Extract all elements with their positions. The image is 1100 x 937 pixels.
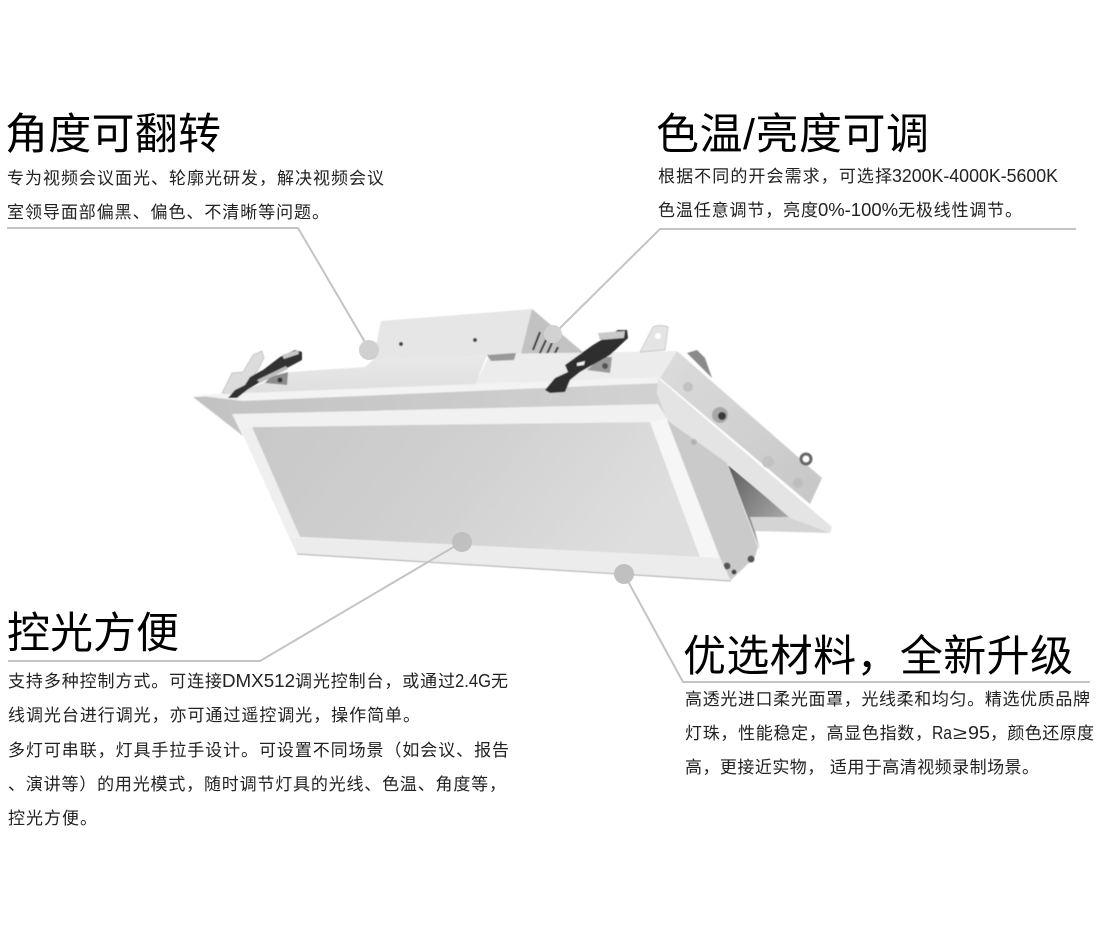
left latch [228, 350, 302, 398]
rear bracket [687, 350, 712, 378]
housing top face [240, 355, 487, 397]
gray side panel [667, 420, 758, 581]
front outer rim [193, 378, 667, 436]
text: angle [7, 169, 384, 222]
marker: control [452, 532, 472, 552]
right rim [657, 378, 832, 533]
block: colour temperature [656, 111, 1058, 220]
heading: angle: 角度可翻转 [5, 111, 221, 159]
bottom white strip [289, 537, 731, 581]
text: control: 无 [491, 672, 508, 691]
text: control: 2.4G [455, 671, 491, 691]
opal panel [252, 422, 700, 557]
back frame behind panel [728, 465, 790, 550]
text: materials: Ra [932, 723, 953, 743]
housing right side [660, 351, 822, 504]
right white strip [650, 421, 720, 558]
left white strip [240, 427, 300, 537]
text: materials [685, 690, 1094, 777]
text: materials: ，颜色还原度 [990, 724, 1094, 743]
marker: colour temperature [544, 325, 562, 343]
text: colour temperature: 无极线性调节。 [898, 201, 1022, 220]
block: control [7, 610, 509, 828]
text: control: 多灯可串联，灯具手拉手设计。可设置不同场景（如会议、报告 [8, 741, 509, 760]
callout line: materials [614, 564, 1090, 682]
text: materials: ≥ [953, 723, 967, 743]
right mounting ear [640, 326, 668, 352]
text: angle: 专为视频会议面光、轮廓光研发，解决视频会议 [7, 169, 384, 188]
heading: control: 控光方便 [7, 610, 179, 658]
text: control [8, 671, 509, 828]
text: colour temperature: 色温任意调节，亮度 [658, 201, 818, 220]
marker: materials [614, 564, 634, 584]
callout line: angle [7, 228, 379, 360]
text: control: 线调光台进行调光，亦可通过遥控调光，操作简单。 [8, 706, 420, 725]
left mounting ear [222, 351, 264, 395]
callout line: colour temperature [544, 229, 1076, 343]
product: tilting LED panel light [193, 309, 832, 581]
right latch [545, 330, 628, 393]
text: colour temperature: 3200K-4000K-5600K [892, 166, 1058, 186]
block: angle [5, 111, 384, 222]
heading: colour temperature: 色温/亮度可调 [656, 111, 929, 159]
text: materials: 95 [968, 723, 990, 743]
text: control: 支持多种控制方式。可连接 [8, 672, 222, 691]
top white strip [232, 404, 668, 428]
text: control: DMX512 [222, 671, 295, 691]
text: colour temperature [658, 166, 1058, 220]
text: materials: 灯珠，性能稳定，高显色指数， [685, 724, 932, 743]
text: colour temperature: 0%-100% [818, 200, 898, 220]
text: angle: 室领导面部偏黑、偏色、不清晰等问题。 [7, 203, 329, 222]
marker: angle [359, 340, 379, 360]
callout line: control [8, 532, 472, 661]
text: materials: 高，更接近实物， 适用于高清视频录制场景。 [685, 758, 1039, 777]
power supply box [373, 309, 582, 360]
text: materials: 高透光进口柔光面罩，光线柔和均匀。精选优质品牌 [685, 690, 1090, 709]
heading: materials: 优选材料，全新升级 [683, 633, 1073, 681]
text: colour temperature: 根据不同的开会需求，可选择 [658, 167, 892, 186]
text: control: 、演讲等）的用光模式，随时调节灯具的光线、色温、角度等， [8, 775, 506, 794]
block: materials [683, 633, 1094, 777]
text: control: 控光方便。 [8, 809, 97, 828]
text: control: 调光控制台，或通过 [295, 672, 455, 691]
